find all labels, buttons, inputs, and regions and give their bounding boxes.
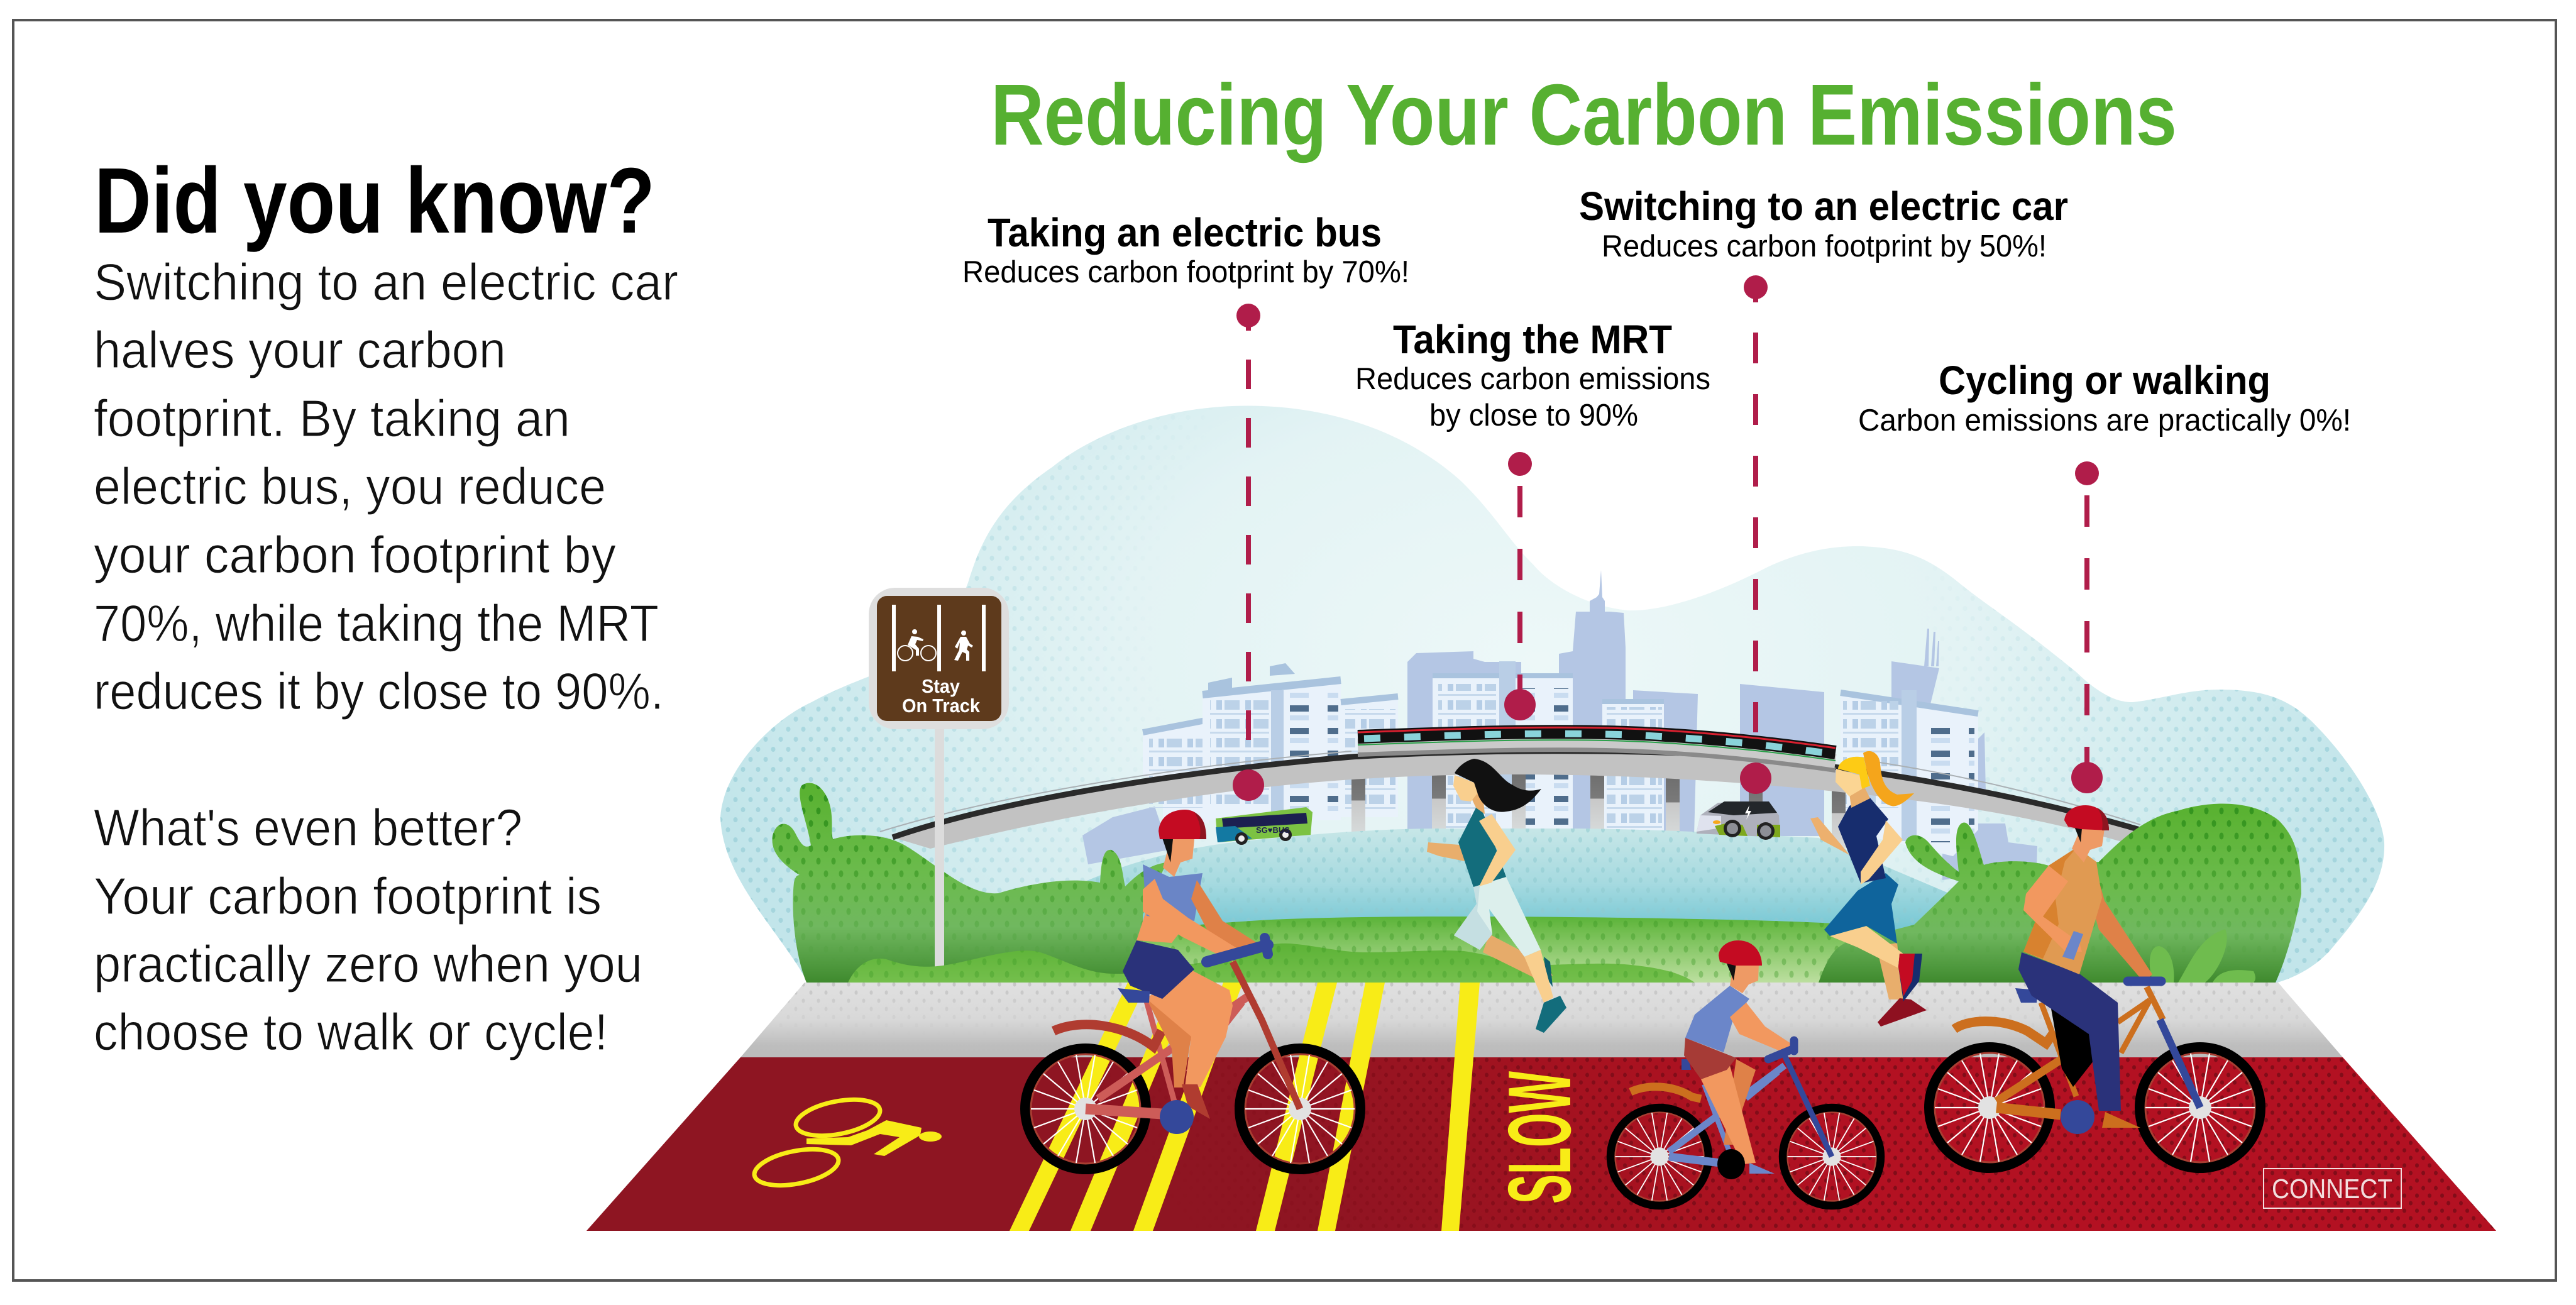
electric car [1697, 801, 1780, 840]
sign text: Stay [922, 675, 960, 697]
text block: facts paragraph [94, 253, 678, 1061]
person: child cycling on blue bike [1610, 940, 1881, 1206]
panel: did you know text [94, 149, 678, 1061]
icon: pedestrian pictogram [954, 630, 973, 661]
icon: yellow bicycle road marking [751, 1094, 942, 1191]
MRT train [1358, 727, 1836, 770]
heading and sub text: by close to 90% [1429, 399, 1638, 432]
text block: facts paragraph: halves your carbon [94, 321, 506, 379]
street sign: stay on track [869, 588, 1009, 968]
text block: facts paragraph: practically zero when you [94, 935, 642, 993]
heading and sub text [1858, 358, 2351, 438]
apartment blocks [1143, 661, 1978, 856]
pointer line [2071, 461, 2103, 793]
text block: facts paragraph: 70%, while taking the MRT [94, 594, 659, 652]
text: SLOW [1490, 1071, 1590, 1204]
left bush [772, 783, 1167, 983]
pointer line [1233, 304, 1264, 801]
pointer line [1504, 452, 1536, 720]
body [1146, 998, 1194, 1088]
text block: facts paragraph: choose to walk or cycle! [94, 1003, 608, 1061]
road: red cycling lane [586, 1057, 2496, 1231]
text block: facts paragraph: Your carbon footprint is [94, 867, 602, 925]
city skyline silhouettes [1082, 570, 2037, 880]
heading and sub text: Reduces carbon footprint by 70%! [962, 255, 1409, 289]
viaduct piers [1351, 773, 1846, 849]
pointer line [1740, 275, 1771, 794]
callout: electric bus [962, 210, 1409, 801]
sign text [902, 675, 981, 717]
person: man cycling on orange bike [1929, 805, 2260, 1168]
heading and sub text: Carbon emissions are practically 0%! [1858, 404, 2351, 438]
text block: facts paragraph: reduces it by close to 90%. [94, 662, 664, 720]
elevated viaduct [880, 751, 2144, 849]
background cloud shape [720, 406, 2384, 983]
body [1724, 1059, 1756, 1145]
road: grey walking path [740, 983, 2343, 1057]
bicycle [1929, 987, 2260, 1168]
icon: cyclist pictogram [898, 629, 936, 661]
callout: cycling or walking [1858, 358, 2351, 793]
person: woman running in teal [1427, 759, 1566, 1033]
foreground shrubs [848, 944, 1695, 983]
river [1069, 829, 1947, 968]
person: woman running in navy [1810, 751, 1927, 1027]
title: Reducing Your Carbon Emissions [991, 67, 2177, 163]
sign text: On Track [902, 695, 981, 717]
bicycle [1610, 1055, 1881, 1206]
electric bus [1216, 807, 1313, 845]
heading and sub text: Reduces carbon emissions [1355, 362, 1710, 396]
heading and sub text: Switching to an electric car [1579, 184, 2068, 229]
midground grass [1069, 917, 1886, 983]
body [2050, 1005, 2096, 1087]
electric bus: SG♥BUS [1256, 825, 1290, 835]
heading and sub text: Reduces carbon footprint by 50%! [1602, 229, 2047, 263]
text block: facts paragraph: Switching to an electric car [94, 253, 678, 311]
right bush [1819, 804, 2301, 983]
panel: city scene backdrop [720, 406, 2384, 983]
text block: facts paragraph: footprint. By taking an [94, 389, 570, 448]
person: woman cycling on red bike [1025, 810, 1360, 1169]
bicycle [1025, 962, 1360, 1169]
yellow lane lines [1010, 983, 1480, 1231]
heading: did you know: Did you know? [94, 149, 655, 253]
callout: electric car [1579, 184, 2068, 794]
logo: connect: CONNECT [2272, 1174, 2392, 1204]
heading and sub text [1355, 317, 1710, 432]
heading and sub text: Taking an electric bus [988, 210, 1382, 255]
heading and sub text: Cycling or walking [1939, 358, 2271, 403]
callout: MRT [1355, 317, 1710, 720]
text block: facts paragraph: What's even better? [94, 798, 522, 857]
heading and sub text [1579, 184, 2068, 263]
text block: facts paragraph: electric bus, you reduce [94, 457, 606, 515]
text block: facts paragraph: your carbon footprint by [94, 526, 616, 584]
heading and sub text: Taking the MRT [1393, 317, 1672, 362]
heading and sub text [962, 210, 1409, 289]
